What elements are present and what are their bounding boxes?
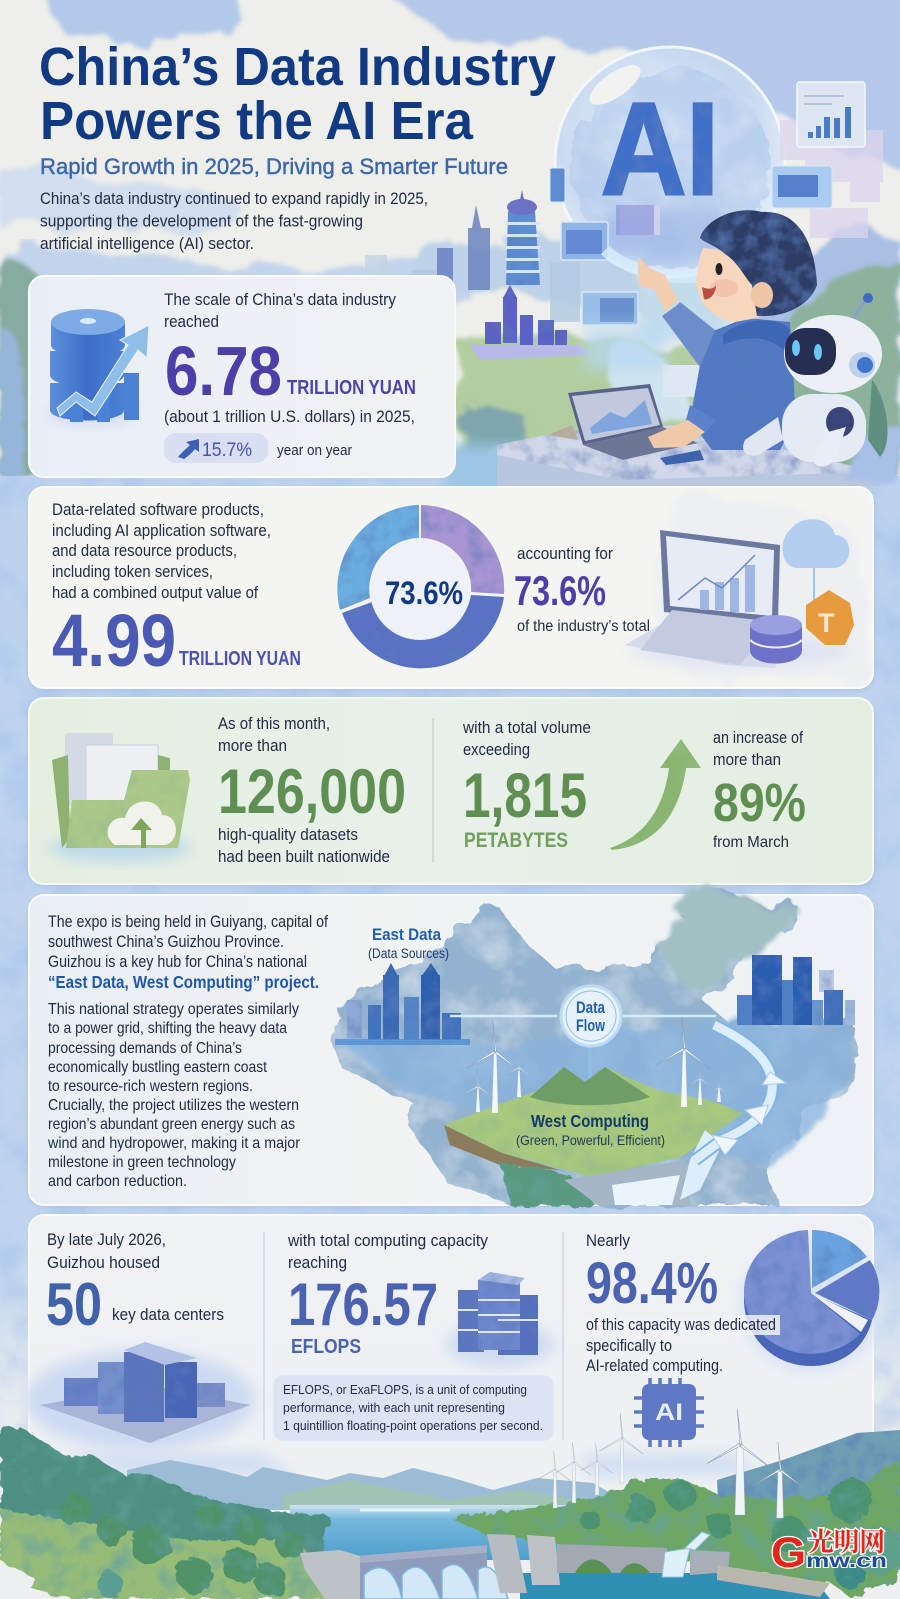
landscape: mountains, lake, dam and turbines [0, 1409, 900, 1599]
text: from March: from March [713, 834, 789, 851]
text: expo: southwest China’s Guizhou Province. [48, 933, 284, 951]
text: as of this month [218, 715, 330, 755]
skyline right [737, 955, 855, 1025]
stat: 89%: 89% [713, 773, 806, 833]
text: products: had a combined output value of [52, 584, 258, 602]
logo: Guangming Online: G [771, 1529, 806, 1577]
map label: West Computing: West Computing [531, 1111, 649, 1131]
stat: 98.4%: 98.4% [586, 1251, 718, 1316]
map illustration: China with data flow [330, 890, 857, 1205]
growth pill: 15.7% [202, 440, 252, 461]
map label: East Data: (Data Sources) [368, 946, 449, 961]
stat: 176.57 EFLOPS: 176.57 [288, 1271, 438, 1338]
text: datasets: had been built nationwide [218, 848, 390, 866]
raised arm [638, 257, 678, 312]
text: total volume: with a total volume [462, 719, 591, 737]
arrow: rising green [610, 739, 701, 850]
stat: 1,815 petabytes: PETABYTES [464, 829, 568, 852]
data flow badge: Flow [576, 1016, 606, 1035]
text: strategy paragraph: economically bustling eastern coast [48, 1059, 267, 1076]
dam and waterfall [564, 1160, 690, 1205]
stat: 1,815 petabytes: 1,815 [463, 761, 587, 831]
dam [300, 1532, 830, 1599]
text: by late July: By late July 2026, [47, 1231, 166, 1249]
callout: EFLOPS definition: performance, with each unit representing [283, 1400, 505, 1415]
stat: 1,815 petabytes [463, 761, 587, 852]
title [39, 37, 556, 151]
east skyline left [347, 963, 461, 1040]
title: Powers the AI Era [40, 91, 474, 151]
pale clouds over the horizon [60, 1452, 760, 1478]
stat: 50 key data centers: key data centers [112, 1306, 224, 1324]
far mountains [127, 1460, 640, 1510]
text: computing capacity: with total computing capacity [287, 1232, 489, 1250]
text: strategy paragraph: Crucially, the project utilizes the western [48, 1097, 299, 1114]
boy pointing at the AI sphere [638, 210, 817, 450]
stat: 4.99 trillion yuan [52, 599, 301, 682]
hand on laptop [648, 420, 705, 448]
growth pill [164, 433, 268, 463]
stat: 4.99 trillion yuan: TRILLION YUAN [179, 648, 301, 670]
hero city illustration [365, 190, 720, 500]
text: datasets: high-quality datasets [218, 826, 358, 844]
text: accounting: of the industry’s total [517, 618, 650, 635]
text: accounting: accounting for [517, 545, 613, 563]
map label: West Computing [516, 1111, 665, 1148]
logo: Guangming Online: mw.cn [806, 1551, 887, 1572]
text: year on year: year on year [277, 443, 352, 459]
text: dedicated to AI: of this capacity was dedicated [586, 1316, 776, 1334]
text: computing capacity [287, 1232, 489, 1272]
glass sphere with AI letters [555, 47, 785, 277]
donut value: 73.6% [385, 575, 463, 611]
lower castle buildings [485, 285, 567, 346]
left hills [0, 1427, 330, 1553]
laptop [548, 384, 704, 465]
text: increase: more than [713, 751, 781, 769]
callout: EFLOPS definition: 1 quintillion floating-point operations per second. [283, 1418, 543, 1433]
panel 5: Guizhou computing [25, 1215, 883, 1505]
text: datasets [218, 826, 390, 866]
data flow beams [450, 1016, 716, 1080]
hair [700, 210, 817, 316]
text: total volume: exceeding [463, 741, 530, 759]
green island [444, 1067, 743, 1177]
text: by late July [47, 1231, 166, 1272]
floating data screens [550, 82, 883, 370]
text: increase [713, 729, 803, 769]
text: scale intro: The scale of China’s data industry [164, 291, 397, 309]
text: computing capacity: reaching [288, 1254, 347, 1272]
text: as of this month: more than [218, 737, 287, 755]
icon: database with growth arrow [48, 309, 149, 424]
pale purple screens [620, 120, 883, 238]
callout: EFLOPS definition: EFLOPS, or ExaFLOPS, is a unit of computing [283, 1382, 527, 1397]
text: by late July: Guizhou housed [47, 1254, 160, 1272]
eye [716, 263, 722, 275]
text: nearly: Nearly [586, 1232, 631, 1250]
stat: 50 key data centers [46, 1271, 224, 1338]
text: dedicated to AI: AI-related computing. [586, 1357, 723, 1375]
stat: 176.57 EFLOPS [288, 1271, 438, 1358]
face [696, 248, 770, 322]
curved blue arrows [695, 1025, 786, 1160]
text: total volume [462, 719, 591, 759]
green land [455, 332, 720, 486]
text: strategy paragraph: milestone in green technology [48, 1154, 236, 1171]
text: expo [48, 913, 328, 971]
callout: EFLOPS definition [273, 1375, 554, 1441]
text: strategy paragraph: processing demands of China’s [48, 1040, 242, 1057]
text: strategy paragraph: and carbon reduction. [48, 1173, 187, 1190]
pie chart [739, 1230, 883, 1373]
small cottage [663, 365, 707, 397]
icon: laptop, coins, cloud, token [625, 519, 854, 668]
stat: 6.78 trillion yuan: TRILLION YUAN [287, 377, 416, 399]
right hills [717, 1430, 900, 1570]
data flow badge [561, 986, 621, 1046]
text: dedicated to AI [584, 1315, 780, 1375]
intro text: China’s data industry continued to expand rapidly in 2025, [40, 189, 428, 208]
logo: Guangming Online [771, 1522, 887, 1577]
icon: data center campus [25, 1342, 255, 1450]
stat: 50 key data centers: 50 [46, 1271, 102, 1338]
chart screen [797, 82, 865, 147]
map label: East Data [368, 925, 449, 961]
stat: 6.78 trillion yuan [165, 332, 416, 410]
icon: AI chip: AI [655, 1399, 683, 1426]
icon: green folder with cloud upload [48, 733, 192, 862]
subtitle: Rapid Growth in 2025, Driving a Smarter Future [40, 154, 508, 179]
map label: West Computing: (Green, Powerful, Efficient) [516, 1133, 665, 1148]
map label: East Data: East Data [372, 925, 441, 944]
icon: AI chip [634, 1378, 704, 1447]
text: expo: The expo is being held in Guiyang, capital of [48, 913, 328, 931]
icon: server racks [445, 1272, 555, 1367]
stat: 176.57 EFLOPS: EFLOPS [291, 1336, 361, 1358]
robot companion [743, 293, 888, 466]
text: strategy paragraph [47, 1001, 301, 1190]
right forest clusters [580, 1478, 900, 1589]
ear [751, 282, 773, 308]
text: strategy paragraph: wind and hydropower, making it a major [47, 1135, 301, 1152]
wind turbines [462, 1018, 727, 1113]
text: strategy paragraph: This national strategy operates similarly [48, 1001, 299, 1018]
text: dedicated to AI: specifically to [586, 1337, 672, 1355]
text: accounting: 73.6% [514, 567, 606, 614]
AI letters: AI [601, 75, 719, 222]
lake [290, 1505, 660, 1560]
text: scale intro: reached [164, 313, 219, 331]
intro text [40, 189, 428, 253]
text: strategy paragraph: to a power grid, shifting the heavy data [48, 1020, 287, 1037]
panel 2: software and data resource products [29, 487, 874, 690]
text: increase: an increase of [713, 729, 803, 747]
title: China’s Data Industry [39, 37, 556, 97]
stat: 6.78 trillion yuan: 6.78 [165, 332, 282, 410]
distant towers [365, 205, 580, 322]
hoodie [680, 318, 796, 450]
intro text: supporting the development of the fast-growing [40, 212, 363, 230]
text: dollars: (about 1 trillion U.S. dollars) in 2025, [164, 408, 415, 426]
pagoda tower [506, 190, 540, 285]
mosaic table with laptop [497, 384, 900, 486]
text: products: Data-related software products, [52, 501, 264, 519]
text: scale intro [164, 291, 397, 331]
wind turbines [538, 1409, 804, 1518]
text: products: including AI application software, [52, 522, 271, 540]
forest clusters [59, 1494, 304, 1598]
stat: 4.99 trillion yuan: 4.99 [52, 599, 176, 682]
mouth [702, 285, 716, 299]
logo: Guangming Online: 光明网 [808, 1522, 885, 1559]
text: products [52, 501, 271, 602]
text: strategy paragraph: to resource-rich western regions. [48, 1078, 253, 1095]
data flow badge: Data [576, 998, 605, 1017]
text: accounting [514, 545, 650, 635]
stat: 126,000: 126,000 [218, 757, 406, 827]
text: as of this month: As of this month, [218, 715, 330, 733]
text: products: including token services, [52, 563, 213, 581]
panel 4: East Data, West Computing [29, 890, 874, 1206]
text: highlighted project name: “East Data, West Computing” project. [48, 972, 319, 992]
text: expo: Guizhou is a key hub for China’s national [48, 953, 307, 971]
text: products: and data resource products, [52, 542, 237, 560]
panel 1: scale of the industry [29, 276, 455, 477]
text: strategy paragraph: region’s abundant green energy such as [48, 1116, 295, 1133]
donut chart [337, 505, 504, 668]
panel 3: datasets [29, 698, 874, 885]
intro text: artificial intelligence (AI) sector. [40, 234, 254, 253]
icon: laptop, coins, cloud, token: T [818, 608, 835, 638]
